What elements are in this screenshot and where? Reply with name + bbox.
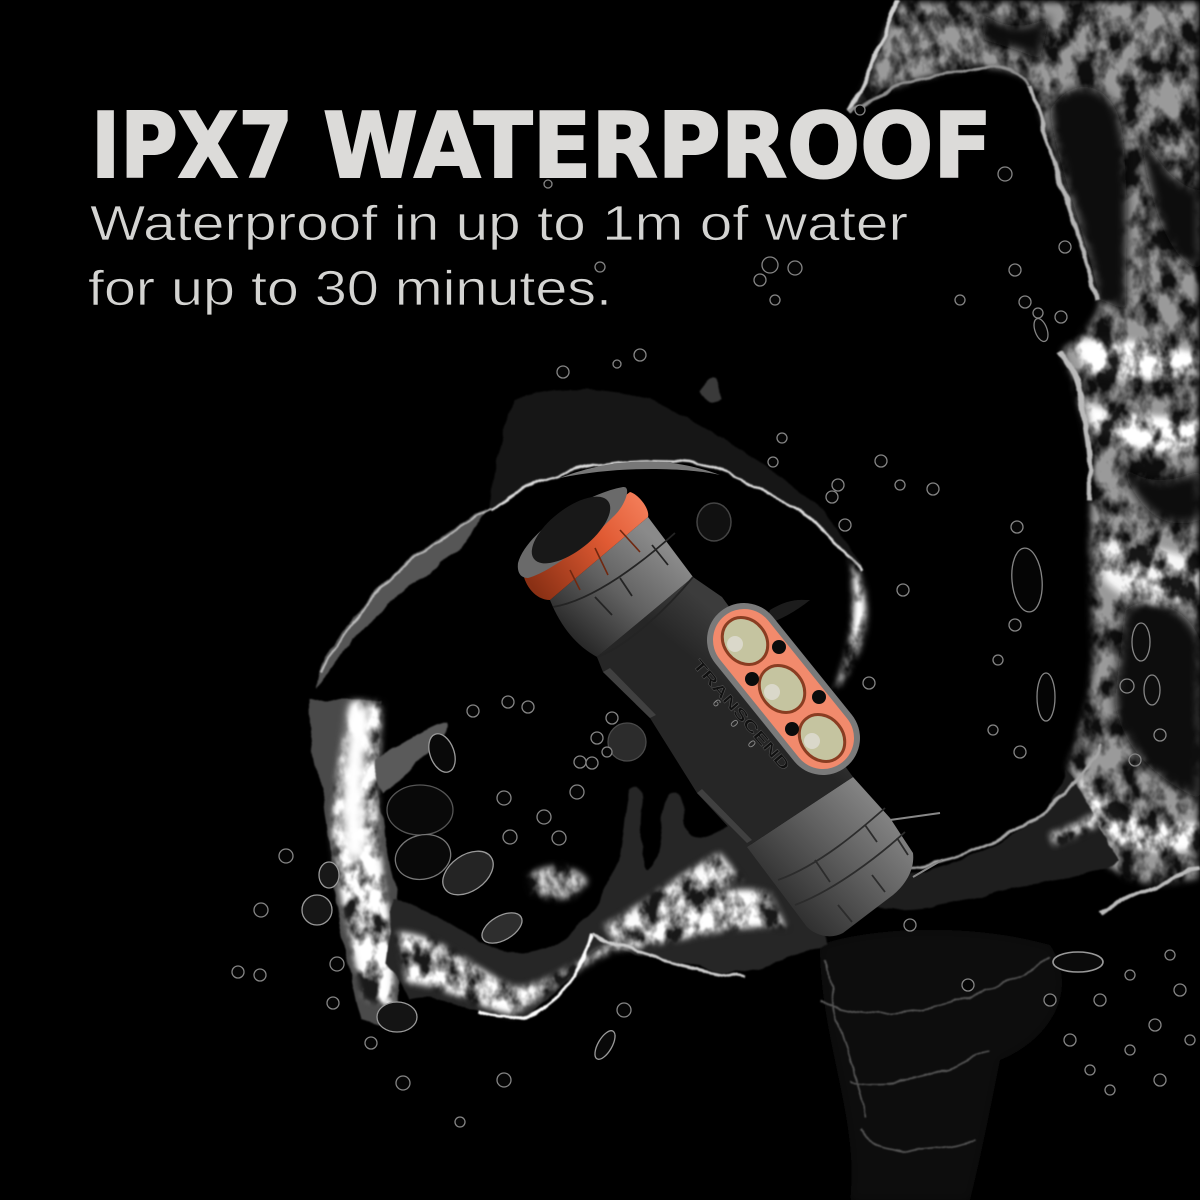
head collar [550,517,693,657]
end collar grooves [778,808,908,922]
water arm: lower right sweep [820,745,1200,1200]
end collar [747,777,913,936]
LED lenses [713,608,854,771]
subtitle [88,197,908,316]
title: IPX7 [91,94,293,199]
screws [745,640,826,736]
head collar grooves [553,533,693,657]
water swirl: lower left basin [302,700,942,1062]
water swirl: upper arc [318,379,867,695]
cap [518,487,627,578]
product label: TRANSCEND [689,657,793,774]
large water bubbles [302,723,646,1062]
product model: 6 0 0 [710,697,758,751]
orange ring [523,492,648,600]
splash band [310,700,405,1030]
light plate [713,608,854,771]
subtitle: Waterproof in up to 1m of water [90,197,908,251]
title: WATERPROOF [323,94,992,199]
product: headlamp [518,485,913,936]
sweep [385,785,830,1020]
LED highlights [727,636,820,749]
water column: right side [850,0,1200,885]
water droplets [232,105,1195,1127]
subtitle: for up to 30 minutes. [88,262,612,316]
main body [597,577,853,847]
